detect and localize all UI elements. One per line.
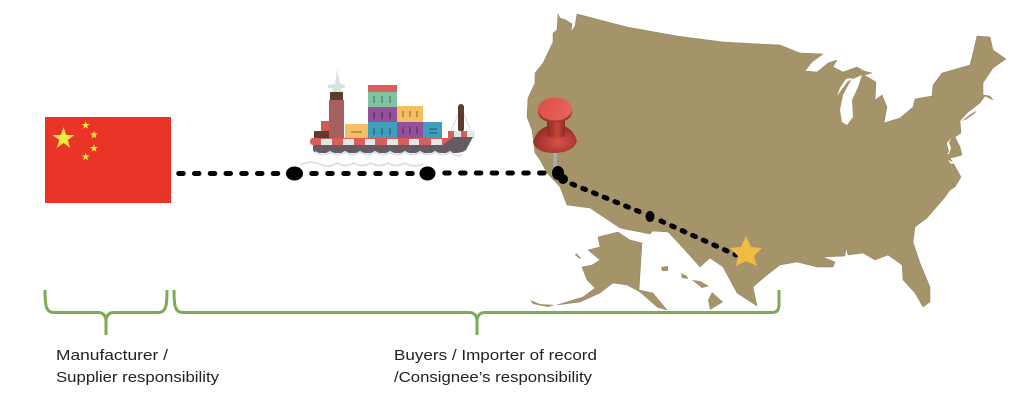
icon: red push pin <box>533 98 577 174</box>
bracket: buyers <box>174 290 779 335</box>
container markings <box>351 96 437 135</box>
label: buyers responsibility: Buyers / Importer of record <box>394 347 597 364</box>
icon: destination star <box>730 236 762 266</box>
map: Delaware and Chesapeake bays <box>947 138 955 164</box>
map: United States <box>527 14 1006 310</box>
label: buyers responsibility <box>394 347 597 386</box>
label: buyers responsibility: /Consignee’s responsibility <box>394 369 593 386</box>
label: manufacturer responsibility <box>56 347 220 386</box>
map: Long Island <box>960 110 977 122</box>
label: manufacturer responsibility: Supplier responsibility <box>56 369 220 386</box>
arrow: dotted route from China to destination <box>179 166 736 255</box>
map: contiguous states <box>527 14 1006 307</box>
flag: China <box>45 117 171 203</box>
map: Lake Michigan <box>837 75 862 125</box>
icon: large star <box>52 127 74 148</box>
label: manufacturer responsibility: Manufacturer / <box>56 347 169 364</box>
map: Hawaii and small islands <box>530 253 723 310</box>
icon: container ship <box>300 69 475 166</box>
bracket: manufacturer <box>45 290 167 335</box>
map: Alaska <box>557 232 667 310</box>
